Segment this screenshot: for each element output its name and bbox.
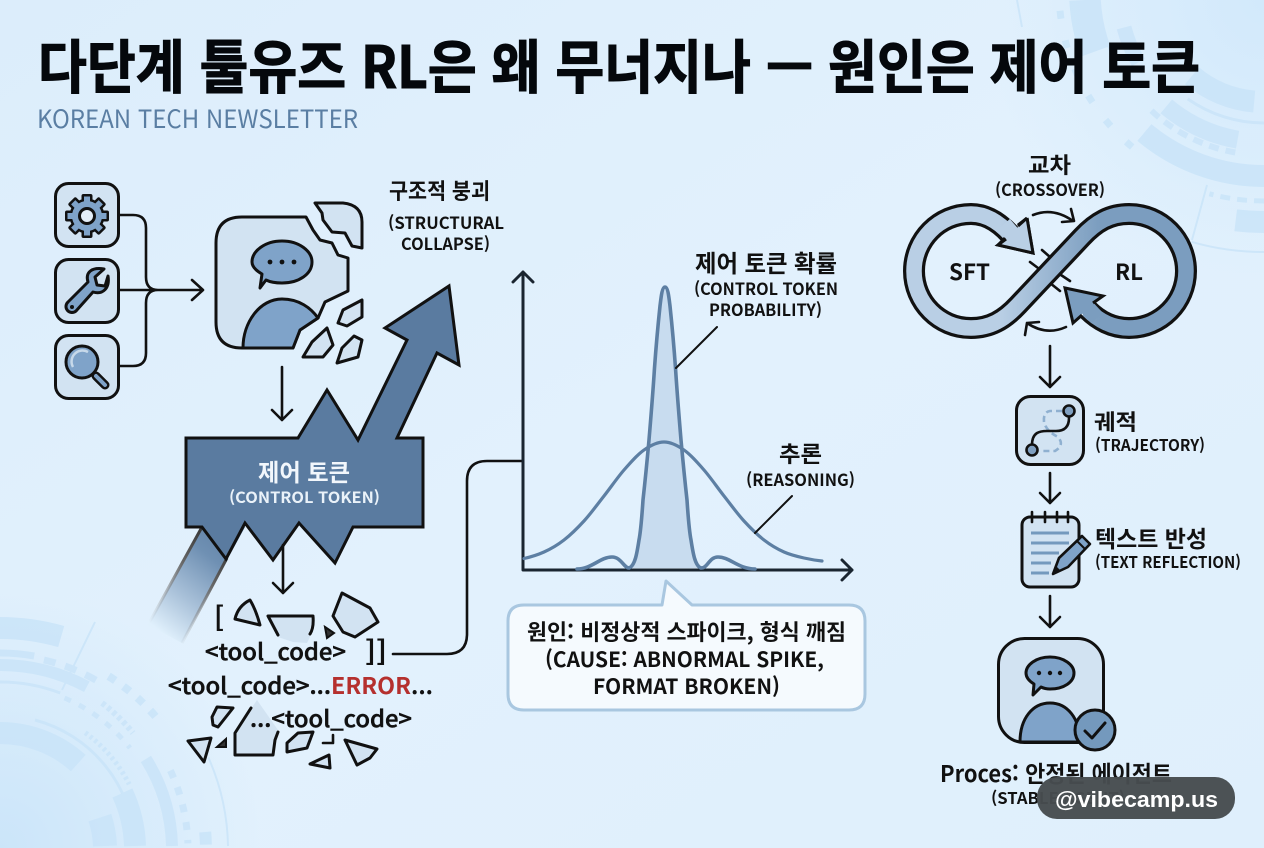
panel: stable agent: (STABLE AGENT) (991, 785, 1125, 809)
icon: gear (56, 184, 118, 246)
subtitle: KOREAN TECH NEWSLETTER (37, 100, 358, 136)
control token label: (CONTROL TOKEN) (229, 486, 380, 508)
top right dial arcs (1017, 0, 1264, 252)
label: reasoning: 추론 (779, 437, 822, 469)
arrow: text reflection to stable agent (1040, 596, 1060, 627)
panel: trajectory: (TRAJECTORY) (1095, 432, 1205, 456)
small cycle arrows (1025, 209, 1074, 335)
panel: trajectory: 궤적 (1094, 405, 1137, 437)
shards (188, 593, 378, 768)
label: structural collapse: 구조적 붕괴 (389, 174, 490, 206)
code text: <tool_code>... (168, 667, 331, 701)
panel: trajectory (1016, 396, 1205, 464)
code text (168, 597, 433, 734)
arrowhead: SFT (998, 218, 1033, 253)
arrow: token to broken code (273, 545, 293, 593)
crossing ticks (1030, 250, 1070, 291)
arrow: agent to control token (272, 367, 292, 420)
crossover label (995, 148, 1105, 201)
spike fill (629, 287, 701, 568)
arrow tail fading out (148, 527, 245, 643)
label: reasoning: (REASONING) (746, 467, 855, 491)
code text: ]] (365, 631, 387, 670)
axes (513, 272, 852, 580)
panel: text reflection (1022, 512, 1241, 587)
code text: ...<tool_code> (250, 700, 412, 734)
control token label: 제어 토큰 (258, 453, 350, 488)
arrow: crossover to trajectory (1040, 346, 1060, 387)
label: structural collapse: COLLAPSE) (401, 231, 490, 255)
panel: broken tool code (168, 461, 523, 768)
label: structural collapse: (STRUCTURAL (388, 210, 504, 234)
label: control token probability: PROBABILITY) (709, 297, 822, 321)
arrowhead: RL (1065, 288, 1103, 323)
watermark badge: @vibecamp.us (1055, 787, 1218, 812)
control token shape (186, 286, 459, 563)
icon: wrench (56, 260, 118, 322)
loop labels: RL (1115, 255, 1143, 287)
infinity ribbon outline (914, 214, 1186, 328)
label: control token probability (694, 244, 838, 321)
curve: control token probability (577, 287, 755, 569)
icon: magnifier (56, 336, 118, 398)
callout: cause: 원인: 비정상적 스파이크, 형식 깨짐 (527, 615, 846, 647)
loop labels (949, 255, 1143, 287)
chart: control token probability vs reasoning (513, 244, 855, 580)
panel: stable agent (940, 638, 1172, 809)
panel: crossover loop (914, 148, 1186, 335)
arrow: trajectory to text reflection (1040, 473, 1060, 503)
callout: cause: FORMAT BROKEN) (593, 671, 780, 701)
crossover label: (CROSSOVER) (995, 177, 1105, 201)
label: control token probability: (CONTROL TOKEN (694, 276, 838, 300)
label: control token probability: 제어 토큰 확률 (695, 244, 837, 279)
infinity ribbon fill (914, 214, 1186, 328)
label: reasoning (746, 437, 855, 491)
panel: stable agent: Proces: 안정된 에이전트 (940, 755, 1172, 789)
crossover label: 교차 (1028, 148, 1071, 180)
code text: <tool_code> (205, 633, 346, 667)
panel: tools and breaking agent (56, 184, 362, 420)
bottom left dial arcs (0, 622, 228, 846)
code text: ... (411, 667, 433, 701)
loop labels: SFT (949, 255, 990, 287)
code text: ERROR (331, 667, 411, 701)
callout: cause: (CAUSE: ABNORMAL SPIKE, (545, 644, 824, 674)
connector lines from tools (118, 215, 203, 366)
panel: control token burst and rising arrow (148, 286, 459, 643)
curve: reasoning (524, 442, 822, 561)
code text: [ (214, 597, 224, 636)
panel: text reflection: (TEXT REFLECTION) (1095, 549, 1241, 573)
panel: text reflection: 텍스트 반성 (1095, 520, 1207, 554)
icon: breaking agent (216, 203, 362, 363)
connector to chart (393, 461, 523, 654)
leader lines (676, 327, 792, 533)
label: structural collapse (388, 174, 504, 255)
callout: cause (508, 581, 865, 710)
control token label (229, 453, 380, 508)
watermark badge (1037, 777, 1235, 819)
